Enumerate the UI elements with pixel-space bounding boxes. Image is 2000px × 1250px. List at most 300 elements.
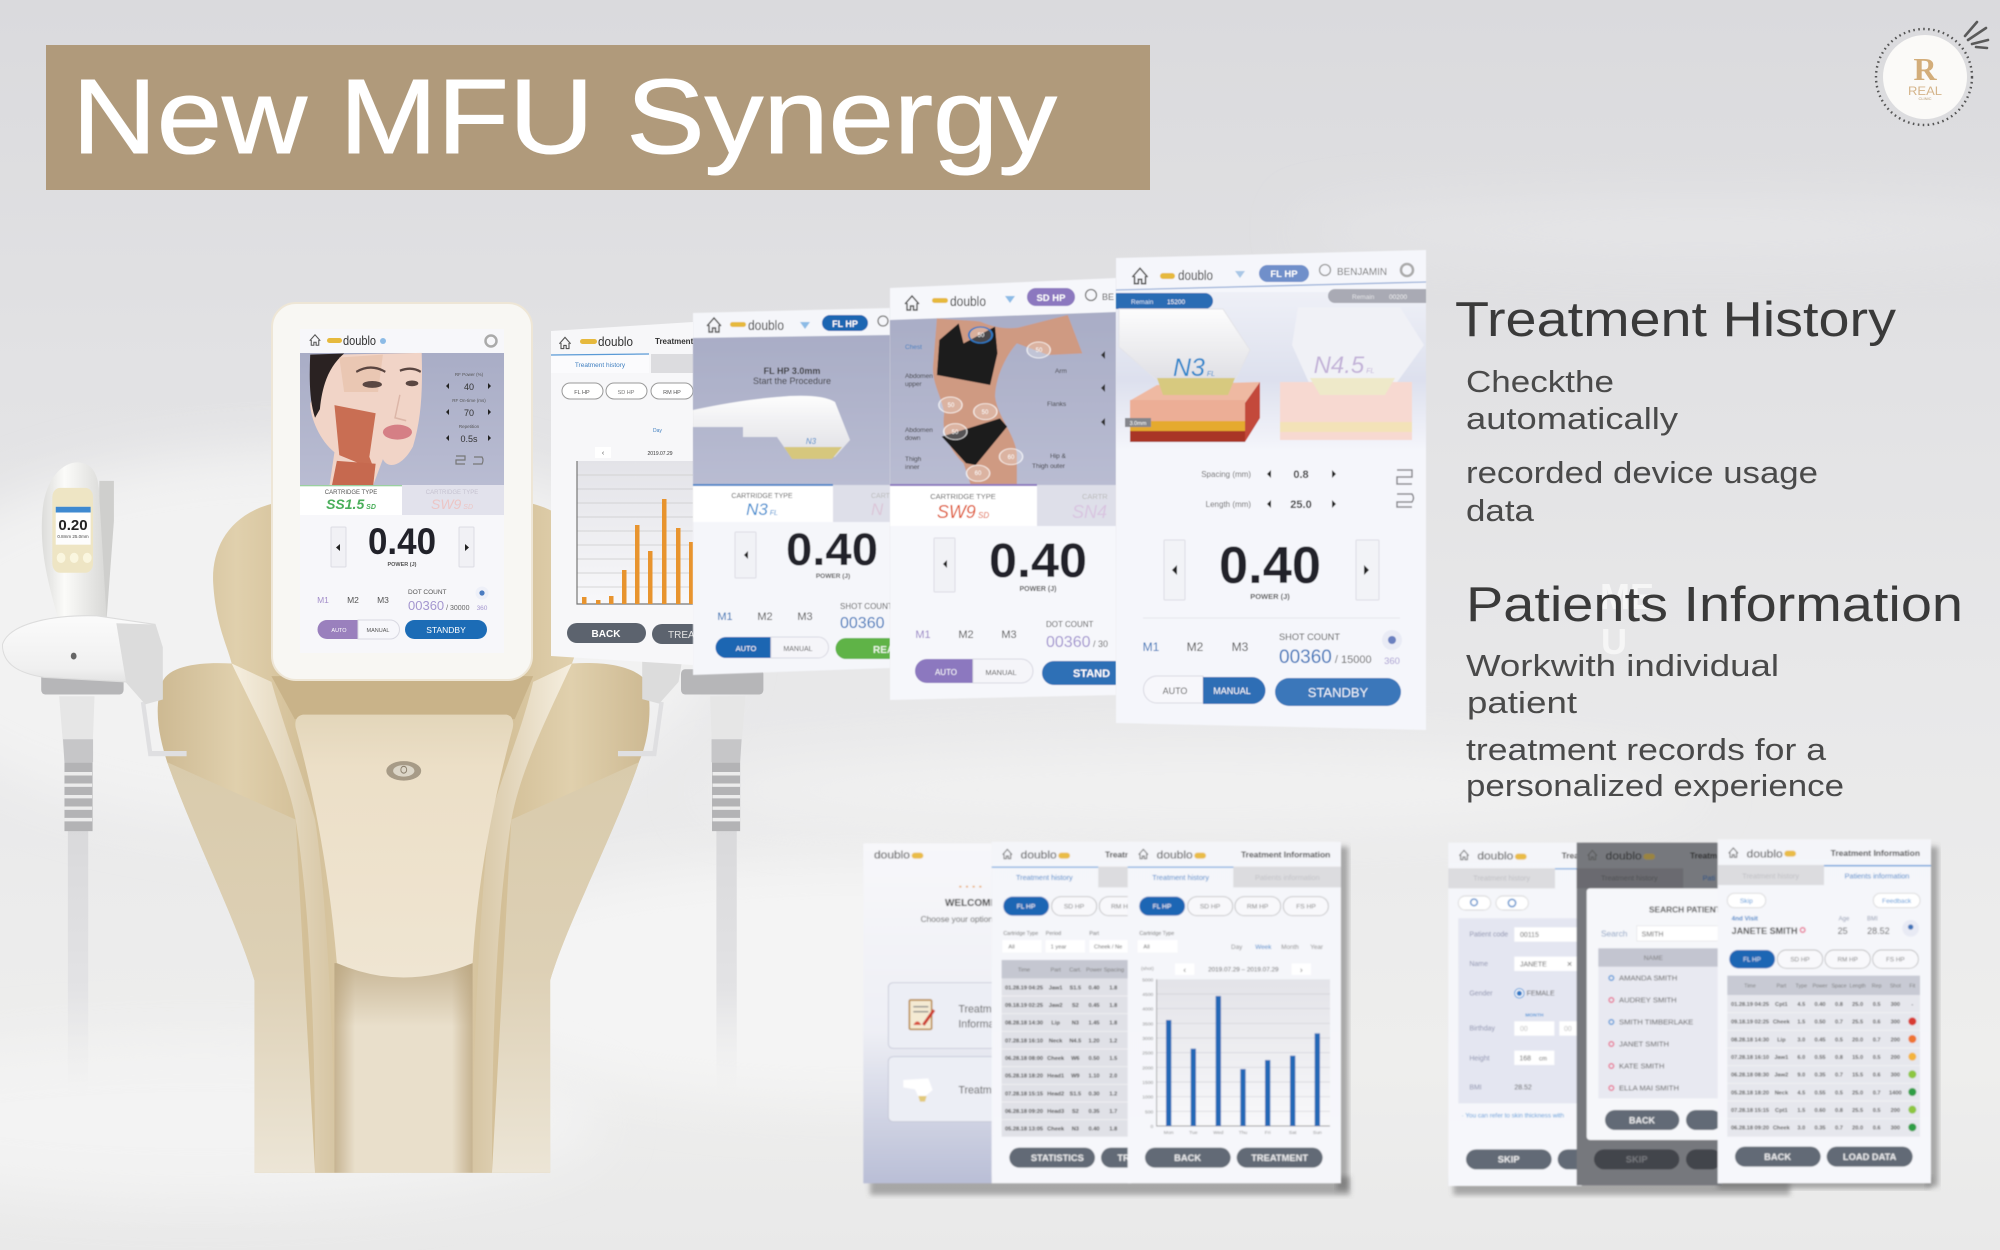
treatment table: 1.20 xyxy=(1088,1038,1100,1044)
face treatment area: 40 xyxy=(464,382,474,392)
blue bar chart: 2500 xyxy=(1142,1051,1154,1057)
memory, count and modes: MANUAL xyxy=(1213,686,1251,696)
screen D: patient form: ✕ xyxy=(1567,962,1573,969)
memory, count and modes: AUTO xyxy=(935,668,957,677)
memory, count and modes: M3 xyxy=(797,611,813,623)
body illustration: Hip & xyxy=(1050,453,1067,460)
treatment table: Cheek xyxy=(1047,1127,1065,1133)
screen C: weekly statistics chart: BACK xyxy=(1174,1153,1201,1163)
memory, count and modes xyxy=(915,620,1116,685)
treatment table: 1.2 xyxy=(1109,1091,1117,1097)
patient records table: 07.28.18 16:10 xyxy=(1731,1055,1769,1061)
screen E: search patient dialog: Treatm xyxy=(1690,851,1717,861)
patient records table: 0.60 xyxy=(1814,1108,1826,1114)
patient records table xyxy=(1727,976,1920,1137)
screen E: search patient dialog: Search xyxy=(1601,928,1628,938)
remain counters: 15200 xyxy=(1167,299,1185,306)
patient records table: Shot xyxy=(1890,983,1901,989)
screen A: welcome: Information xyxy=(958,1019,1012,1031)
patient records table: Type xyxy=(1796,983,1807,989)
header xyxy=(1116,264,1426,290)
bright strip left xyxy=(232,663,334,1173)
treatment table: 07.28.18 15:15 xyxy=(1005,1091,1043,1097)
screen D: patient form: BMI xyxy=(1469,1084,1482,1091)
screen F: patient treatment records: 4nd Visit xyxy=(1732,916,1759,923)
text block: treatment history description: data xyxy=(1466,493,1535,528)
body illustration: 60 xyxy=(1008,455,1015,461)
body illustration: Flanks xyxy=(1047,401,1067,408)
memory, count and modes: M2 xyxy=(1187,640,1204,654)
screen B: treatment list: All xyxy=(1008,945,1015,951)
heading: treatment history: Treatment History xyxy=(1455,293,1897,347)
screen B: treatment list: SD HP xyxy=(1064,903,1085,910)
screen C: weekly statistics chart: Patients information xyxy=(1255,873,1320,882)
patient records table: Cheek xyxy=(1773,1126,1791,1132)
patient records table: 1.5 xyxy=(1797,1020,1805,1026)
logo: Real Clinic xyxy=(1876,22,1988,125)
power readout: POWER (J) xyxy=(816,573,850,580)
blue bar chart: 1000 xyxy=(1142,1095,1154,1101)
blue bar chart: 1500 xyxy=(1142,1080,1154,1086)
screen D: patient form: MONTH xyxy=(1525,1012,1544,1018)
patient records table: 0.7 xyxy=(1873,1090,1881,1096)
cartridge selector: N xyxy=(871,500,884,519)
treatment table: Power xyxy=(1086,967,1102,973)
cartridge N4.5 on skin, faded xyxy=(1280,307,1424,440)
patient records table: 300 xyxy=(1891,1020,1900,1026)
screen header: doublo xyxy=(343,333,376,348)
screen C: weekly statistics chart: SD HP xyxy=(1200,903,1221,910)
screen C: weekly statistics chart: All xyxy=(1143,945,1150,951)
treatment table: 0.30 xyxy=(1088,1091,1100,1097)
handpiece illustration: N3 xyxy=(806,437,817,446)
logo: Real Clinic: CLINIC xyxy=(1918,96,1932,101)
treatment table: W6 xyxy=(1071,1056,1080,1062)
memory, count and modes: M1 xyxy=(717,611,733,623)
tabs and cartridge filter pills: 2019.07.29 xyxy=(647,451,673,457)
treatment table: 0.45 xyxy=(1088,1003,1100,1009)
treatment table: Part xyxy=(1050,967,1061,973)
power readout xyxy=(1164,537,1379,601)
screen C: weekly statistics chart: doublo xyxy=(1157,850,1193,862)
screen A: welcome: Choose your option xyxy=(921,914,993,924)
screen E: search patient dialog: NAME xyxy=(1644,955,1664,962)
screen C: weekly statistics chart: Treatment history xyxy=(1152,873,1209,882)
patient records table: Jaw1 xyxy=(1774,1055,1788,1061)
treatment table: 09.18.19 02:25 xyxy=(1005,1003,1043,1009)
cartridge N3 on skin xyxy=(1119,309,1260,442)
patient records table: Cheek xyxy=(1773,1020,1791,1026)
cartridge selector: CARTRIDGE TYPE xyxy=(325,490,377,496)
cartridge N4.5 on skin, faded: N4.5 FL xyxy=(1314,352,1375,379)
header: doublo xyxy=(1178,267,1213,283)
screens group: treatment history cards xyxy=(863,842,1350,1195)
screen: treatment history bar chart xyxy=(551,322,702,665)
screen B: treatment list: Part xyxy=(1089,931,1100,937)
mode buttons: AUTO xyxy=(331,628,347,634)
screen F: patient treatment records: JANETE SMITH xyxy=(1732,926,1798,936)
patient records table: 06.28.18 08:30 xyxy=(1731,1073,1769,1079)
patient records table: 0.50 xyxy=(1814,1020,1826,1026)
treatment table: 05.28.18 13:05 xyxy=(1005,1127,1043,1133)
treatment table: 1.8 xyxy=(1109,985,1117,991)
treatment table: 1.8 xyxy=(1109,1127,1117,1133)
orange bar chart xyxy=(577,461,693,604)
screen F: patient treatment records: doublo xyxy=(1747,848,1783,860)
screen F: patient treatment records: BACK xyxy=(1764,1152,1791,1162)
patient records table: Lip xyxy=(1777,1037,1786,1043)
patient records table: Rep xyxy=(1872,983,1882,989)
cartridge area tint xyxy=(1116,292,1426,452)
front panel xyxy=(295,715,513,978)
patient records table: 200 xyxy=(1891,1037,1900,1043)
patient records table: 0.5 xyxy=(1835,1090,1843,1096)
screen F: patient treatment records: RM HP xyxy=(1837,956,1858,963)
blue bar chart: Fri xyxy=(1265,1130,1271,1136)
tabs and cartridge filter pills: Day xyxy=(653,428,662,434)
title band: New MFU Synergy xyxy=(72,58,1057,176)
panel: right-hand feature text xyxy=(1455,293,1963,803)
memory, count and modes: MANUAL xyxy=(783,646,813,653)
treatment table: 2.0 xyxy=(1109,1074,1117,1080)
screen E: search patient dialog: AUDREY SMITH xyxy=(1619,996,1677,1005)
treatment table: S1.5 xyxy=(1070,985,1081,991)
logo: Real Clinic: REAL xyxy=(1908,84,1942,98)
spacing and length controls: Spacing (mm) xyxy=(1201,470,1251,479)
screen D: patient form: SKIP xyxy=(1498,1155,1520,1165)
screen: FL HP start procedure xyxy=(693,308,894,675)
screen B: treatment list: FL HP xyxy=(1017,903,1036,910)
screens group: patient information cards xyxy=(1448,839,1938,1195)
treatment table: 08.28.18 14:30 xyxy=(1005,1021,1043,1027)
screen C: weekly statistics chart: › xyxy=(1300,965,1303,974)
ghost label: MFU xyxy=(1600,576,1654,662)
cartridge selector: CARTRIDGE TYPE xyxy=(930,492,996,501)
cartridge selector: CARTRIDGE TYPE xyxy=(426,490,478,496)
screen E: search patient dialog: Treatment history xyxy=(1601,874,1658,883)
cartridge selector xyxy=(890,484,1116,526)
patient records table: 0.8 xyxy=(1835,1002,1843,1008)
patient records table: Time xyxy=(1744,983,1756,989)
treatment table: Spacing xyxy=(1104,967,1124,973)
treatment table: Head1 xyxy=(1047,1074,1064,1080)
face treatment area xyxy=(300,353,504,485)
screen F: patient treatment records: 28.52 xyxy=(1867,926,1890,936)
body illustration: 50 xyxy=(982,410,989,416)
screen E: search patient dialog: SMITH TIMBERLAKE xyxy=(1619,1018,1693,1027)
screen D: patient form: Name xyxy=(1469,961,1488,968)
body illustration: upper xyxy=(905,381,922,388)
patient records table: 3.0 xyxy=(1797,1126,1805,1132)
screen E: search patient dialog: BACK xyxy=(1629,1115,1655,1125)
text block: patients information description: Workwith individual xyxy=(1466,648,1779,683)
memory and count: 00360 / 30000 xyxy=(408,598,470,613)
cartridge selector: SW9 SD xyxy=(937,502,989,522)
ghost label: MFU: ME xyxy=(1600,576,1654,617)
screen F: patient treatment records xyxy=(1718,839,1931,1183)
treatment table: Head3 xyxy=(1047,1109,1064,1115)
text block: patients information description: treatment records for a xyxy=(1466,732,1827,767)
memory, count and modes: M3 xyxy=(1232,640,1249,654)
patient records table: Power xyxy=(1812,983,1828,989)
blue bar chart: 4500 xyxy=(1142,992,1154,998)
screen C: weekly statistics chart: Month xyxy=(1281,944,1299,951)
patient records table: 1400 xyxy=(1889,1090,1902,1096)
patient records table: 9.0 xyxy=(1797,1073,1805,1079)
header xyxy=(905,288,1114,310)
screen F: patient treatment records: SD HP xyxy=(1790,956,1810,963)
screen E: search patient dialog: KATE SMITH xyxy=(1619,1062,1664,1071)
patient records table: 25.0 xyxy=(1852,1002,1863,1008)
patient records table: 01.28.19 04:25 xyxy=(1731,1002,1769,1008)
memory and count: 360 xyxy=(477,605,488,612)
memory and count xyxy=(317,586,488,613)
screen C: weekly statistics chart: FL HP xyxy=(1153,903,1172,910)
patient records table: 0.6 xyxy=(1873,1020,1881,1026)
memory, count and modes: 00360 xyxy=(840,615,885,632)
screen D: patient form: cm xyxy=(1539,1056,1547,1062)
treatment table xyxy=(1002,960,1132,1137)
screen B: treatment list: Treatm xyxy=(1105,849,1132,859)
memory, count and modes: SHOT COUNT xyxy=(1279,632,1341,642)
blue bar chart: Sun xyxy=(1313,1130,1322,1136)
header: BE xyxy=(1102,292,1114,302)
patient records table: 0.7 xyxy=(1873,1037,1881,1043)
treatment table: N4.5 xyxy=(1069,1038,1081,1044)
patient records table: Cpt1 xyxy=(1775,1108,1788,1114)
memory, count and modes: 00360 / 30 xyxy=(1046,634,1108,651)
screen D: patient form: 00 xyxy=(1520,1026,1528,1033)
power readout: 0.40 xyxy=(1219,537,1321,595)
screen E: search patient dialog: JANET SMITH xyxy=(1619,1040,1669,1049)
blue bar chart: Tue xyxy=(1189,1130,1198,1136)
cartridge selector xyxy=(300,485,504,515)
chart screen buttons: TREAT xyxy=(668,630,700,641)
patient records table: 0.8 xyxy=(1835,1108,1843,1114)
header: FL HP xyxy=(832,319,858,329)
screen C: weekly statistics chart: Treatment Information xyxy=(1241,849,1330,859)
text block: treatment history description xyxy=(1466,364,1818,528)
screen: SD HP body treatment xyxy=(890,278,1116,700)
patient records table: Fit xyxy=(1909,983,1916,989)
treatment table: Head2 xyxy=(1047,1091,1064,1097)
screen C: weekly statistics chart: TREATMENT xyxy=(1251,1153,1308,1163)
patient records table: 05.28.18 18:20 xyxy=(1731,1090,1769,1096)
treatment table: 0.50 xyxy=(1088,1056,1100,1062)
handpiece illustration: Start the Procedure xyxy=(753,376,831,386)
tabs and cartridge filter pills: Treatment history xyxy=(575,362,626,369)
device: left handpiece with cable xyxy=(2,462,187,1098)
text block: treatment history description: Checkthe xyxy=(1466,364,1614,399)
patient records table: 300 xyxy=(1891,1002,1900,1008)
screen C: weekly statistics chart: RM HP xyxy=(1247,903,1269,910)
blue bar chart: Mon xyxy=(1164,1130,1174,1136)
memory and count: M1 xyxy=(317,595,329,605)
body illustration: 50 xyxy=(952,430,959,436)
header: doublo xyxy=(950,293,986,309)
patient records table: 08.28.18 14:30 xyxy=(1731,1037,1769,1043)
bright strip right xyxy=(473,663,572,1173)
screen D: patient form: 00115 xyxy=(1520,932,1539,939)
chart screen buttons xyxy=(567,623,702,644)
memory, count and modes: M1 xyxy=(915,629,931,641)
patient records table: 0.55 xyxy=(1814,1055,1826,1061)
handpiece illustration xyxy=(693,335,890,485)
screen D: patient form: 00 xyxy=(1564,1026,1572,1033)
patient records table: 0.6 xyxy=(1873,1073,1881,1079)
treatment table: Jaw1 xyxy=(1049,985,1063,991)
wing shading right xyxy=(492,762,639,1173)
body illustration: Abdomen xyxy=(905,373,933,380)
screen F: patient treatment records: Skip xyxy=(1740,898,1753,905)
screen B: treatment list: Treatment history xyxy=(1016,873,1073,882)
screen: FL HP cartridge settings xyxy=(1116,250,1426,730)
tabs and cartridge filter pills: SD HP xyxy=(618,390,635,396)
remain counters: Remain xyxy=(1352,294,1375,301)
cartridge selector: N3 FL xyxy=(746,500,778,519)
memory and count: M3 xyxy=(377,595,389,605)
patient records table: 15.5 xyxy=(1852,1073,1863,1079)
mode buttons: STANDBY xyxy=(426,625,466,635)
patient records table: 0.5 xyxy=(1873,1055,1881,1061)
title band xyxy=(46,45,1150,190)
treatment table: N3 xyxy=(1072,1021,1079,1027)
body illustration xyxy=(890,312,1116,485)
cartridge selector: CARTR xyxy=(1082,492,1108,501)
blue bar chart: 3500 xyxy=(1142,1021,1154,1027)
body illustration: down xyxy=(905,435,921,442)
power readout: POWER (J) xyxy=(387,562,417,568)
cartridge selector: SW9 SD xyxy=(431,496,473,512)
blue bar chart: 2000 xyxy=(1142,1065,1154,1071)
screen F: patient treatment records: 25 xyxy=(1838,926,1848,936)
treatment table: 0.40 xyxy=(1088,985,1100,991)
mode buttons: MANUAL xyxy=(367,628,389,634)
screen C: weekly statistics chart: Day xyxy=(1231,944,1243,951)
header xyxy=(707,315,888,333)
treatment table: 1.2 xyxy=(1109,1038,1117,1044)
power readout: 0.40 xyxy=(786,524,878,575)
screen C: weekly statistics chart: Year xyxy=(1310,944,1323,951)
screen E: search patient dialog: ELLA MAI SMITH xyxy=(1619,1084,1679,1093)
patient records table: - xyxy=(1911,1002,1913,1008)
logo: Real Clinic: R xyxy=(1913,51,1937,87)
screen B: treatment list: TR xyxy=(1117,1153,1130,1163)
patient records table: Neck xyxy=(1775,1090,1789,1096)
patient records table: 0.40 xyxy=(1814,1002,1826,1008)
screen D: patient form: FEMALE xyxy=(1527,991,1555,998)
screen D: patient form: 28.52 xyxy=(1514,1084,1532,1091)
screen D: patient form xyxy=(1448,843,1591,1186)
face treatment area: 0.5s xyxy=(460,434,478,444)
power readout: POWER (J) xyxy=(1250,592,1290,601)
patient records table: 25.0 xyxy=(1852,1090,1863,1096)
patient records table: 0.7 xyxy=(1835,1073,1843,1079)
body illustration: 50 xyxy=(948,403,955,409)
chart screen buttons: BACK xyxy=(592,629,621,640)
treatment table: 07.28.18 16:10 xyxy=(1005,1038,1043,1044)
screen F: patient treatment records: FS HP xyxy=(1886,956,1905,963)
patient records table: 200 xyxy=(1891,1055,1900,1061)
cartridge selector: SS1.5 SD xyxy=(326,496,376,512)
memory, count and modes: M2 xyxy=(757,611,773,623)
screen E: search patient dialog: SKIP xyxy=(1626,1155,1648,1165)
treatment table: 1.8 xyxy=(1109,1003,1117,1009)
screen C: weekly statistics chart: ‹ xyxy=(1183,965,1186,974)
face treatment area: RF Power (%) xyxy=(455,372,484,377)
body illustration: 50 xyxy=(978,333,985,339)
remain counters: Remain xyxy=(1131,299,1154,306)
body illustration: Thigh xyxy=(905,456,922,463)
memory, count and modes: SHOT COUNT xyxy=(840,602,893,611)
screen E: search patient dialog: Pati xyxy=(1703,874,1716,883)
wing shading left xyxy=(167,762,315,1173)
treatment table: S1.5 xyxy=(1070,1091,1081,1097)
screen D: patient form: · You can refer to skin thickness with xyxy=(1462,1112,1565,1119)
blue bar chart: 3000 xyxy=(1142,1036,1154,1042)
blue bar chart: 5000 xyxy=(1142,977,1154,983)
screen C: weekly statistics chart: (shot) xyxy=(1141,966,1154,972)
body illustration: Arm xyxy=(1055,368,1067,375)
blue bar chart xyxy=(1142,977,1330,1136)
device touchscreen UI xyxy=(300,329,504,653)
spacing and length controls: 0.8 xyxy=(1293,469,1309,481)
handpiece illustration: FL HP 3.0mm xyxy=(764,366,820,376)
patient records table: Part xyxy=(1776,983,1787,989)
blue bar chart: 4000 xyxy=(1142,1007,1154,1013)
patient records table: 0.5 xyxy=(1873,1108,1881,1114)
patient records table: 09.18.19 02:25 xyxy=(1731,1020,1769,1026)
screen B: treatment list xyxy=(992,842,1144,1183)
patient records table: 1.5 xyxy=(1797,1108,1805,1114)
blue bar chart: Wed xyxy=(1213,1130,1224,1136)
screen B: treatment list: Period xyxy=(1046,931,1061,937)
tabs and cartridge filter pills: FL HP xyxy=(574,390,590,396)
text block: patients information description xyxy=(1466,648,1844,803)
cartridge selector: SN4 xyxy=(1072,502,1107,522)
treatment table: W9 xyxy=(1071,1074,1080,1080)
handpiece display reading: 0.8mm 25.0mm xyxy=(57,534,89,539)
remain counters xyxy=(1116,289,1426,309)
screen D: patient form: Patient code xyxy=(1469,932,1508,939)
memory, count and modes: STAND xyxy=(1073,668,1110,680)
treatment table: 1.7 xyxy=(1109,1109,1117,1115)
screen A: welcome: Treatment xyxy=(958,1003,1007,1015)
screen F: patient treatment records: FL HP xyxy=(1743,956,1761,963)
patient records table: 06.28.18 09:20 xyxy=(1731,1126,1769,1132)
memory, count and modes: DOT COUNT xyxy=(1046,620,1094,629)
patient records table: 25.5 xyxy=(1852,1108,1863,1114)
screen A: welcome: doublo xyxy=(874,850,910,862)
treatment table: Cheek xyxy=(1047,1056,1065,1062)
device: touchscreen bezel xyxy=(272,303,532,680)
power button xyxy=(386,761,421,781)
screen D: patient form: Height xyxy=(1469,1055,1490,1062)
text block: treatment history description: automatically xyxy=(1466,401,1679,436)
patient records table: Length xyxy=(1850,983,1866,989)
spacing and length controls: 25.0 xyxy=(1290,499,1312,511)
mode buttons xyxy=(318,620,487,639)
device: MFU machine body xyxy=(158,504,650,1173)
screen C: weekly statistics chart: FS HP xyxy=(1296,903,1316,910)
heading: patients information: Patients Information xyxy=(1466,578,1963,632)
collar shadow xyxy=(271,676,533,719)
screen E: search patient dialog xyxy=(1577,843,1722,1185)
memory, count and modes: M2 xyxy=(958,629,974,641)
treatment table: 06.28.18 08:00 xyxy=(1005,1056,1043,1062)
blue bar chart: Sat xyxy=(1289,1130,1297,1136)
treatment table: N3 xyxy=(1072,1127,1079,1133)
